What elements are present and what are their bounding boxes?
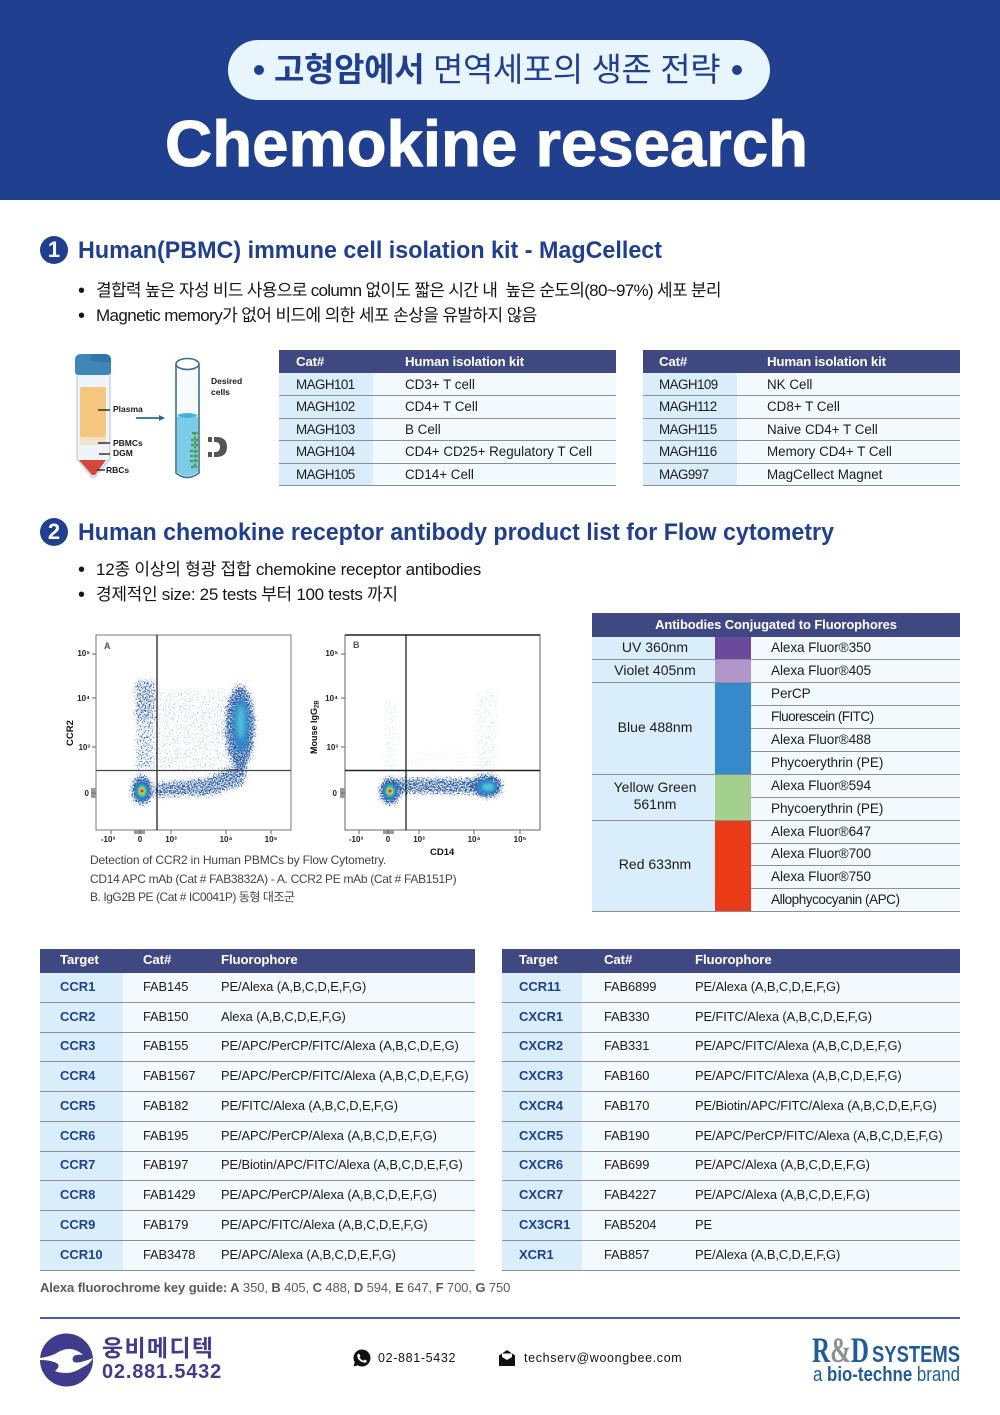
text: •	[78, 280, 85, 302]
plot A y axis title: CCR2	[65, 720, 76, 746]
subtitle pill	[228, 40, 770, 100]
label: desired cells: Desired	[211, 376, 242, 386]
product table header: PE/Alexa (A,B,C,D,E,F,G)	[221, 979, 366, 994]
product table header: PE/APC/Alexa (A,B,C,D,E,F,G)	[221, 1247, 396, 1262]
icon: woongbee logo	[40, 1334, 93, 1386]
table header row: CD4+ CD25+ Regulatory T Cell	[405, 444, 592, 459]
plot B x ticks: 10³	[413, 835, 425, 844]
right pill bullet	[732, 65, 742, 75]
fluorophore table header: Alexa Fluor®350	[771, 640, 871, 655]
main title: Chemokine research	[165, 107, 808, 180]
header banner	[0, 0, 1000, 200]
plot B x ticks: 10⁵	[514, 835, 527, 844]
product table header: PE/Biotin/APC/FITC/Alexa (A,B,C,D,E,F,G)	[695, 1098, 937, 1113]
product table header: PE/Alexa (A,B,C,D,E,F,G)	[695, 1247, 840, 1262]
icon: phone bubble	[353, 1350, 370, 1366]
product table header: PE/APC/FITC/Alexa (A,B,C,D,E,F,G)	[695, 1068, 902, 1083]
product table header	[40, 949, 475, 1270]
product table header: FAB699	[604, 1157, 649, 1172]
product table header: FAB1567	[143, 1068, 195, 1083]
phone number: 02-881-5432	[378, 1351, 456, 1365]
product table header: Target	[60, 952, 99, 967]
fluorophore table header: Fluorescein (FITC)	[771, 709, 874, 724]
alexa key guide: Alexa fluorochrome key guide: A 350, B 405, C 488, D 594, E 647, F 700, G 750	[40, 1280, 510, 1295]
product table header: FAB197	[143, 1157, 188, 1172]
plot B y ticks	[325, 649, 338, 798]
product table header: FAB330	[604, 1009, 649, 1024]
section 2 bullet two: 경제적인 size: 25 tests 부터 100 tests 까지	[96, 585, 398, 604]
section 2 number badge	[40, 518, 68, 546]
flow plot caption	[90, 853, 456, 904]
fluorophore table header: Alexa Fluor®488	[771, 732, 871, 747]
plot A label: A	[104, 641, 111, 651]
fluorophore table header: Phycoerythrin (PE)	[771, 755, 883, 770]
product table header: CXCR2	[519, 1038, 563, 1053]
product table header: FAB331	[604, 1038, 649, 1053]
product table header: PE/APC/FITC/Alexa (A,B,C,D,E,F,G)	[695, 1038, 902, 1053]
product table header: Target	[519, 952, 558, 967]
plot B x ticks: 0	[386, 835, 391, 844]
product table header: FAB155	[143, 1038, 188, 1053]
table header row: NK Cell	[767, 377, 812, 392]
fluorophore table header: Violet 405nm	[614, 662, 696, 678]
subtitle bold: 고형암에서	[274, 51, 424, 88]
product table header: FAB3478	[143, 1247, 195, 1262]
flow plot caption: CD14 APC mAb (Cat # FAB3832A) - A. CCR2 PE mAb (Cat # FAB151P)	[90, 872, 456, 886]
plot A scatter density	[131, 680, 255, 805]
left pill bullet	[254, 65, 264, 75]
logo: R&D Systems: SYSTEMS	[872, 1341, 960, 1367]
table: products left	[40, 949, 475, 1271]
text: •	[78, 559, 85, 581]
fluorophore table header: Phycoerythrin (PE)	[771, 801, 883, 816]
plot B x ticks	[349, 835, 527, 844]
plot B y ticks: 10³	[326, 743, 338, 752]
table header row: MAGH101	[296, 377, 355, 392]
product table header: XCR1	[519, 1247, 554, 1262]
table header row: MAGH102	[296, 399, 355, 414]
table header row: CD3+ T cell	[405, 377, 475, 392]
table header row: Naive CD4+ T Cell	[767, 422, 878, 437]
product table header: PE	[695, 1217, 712, 1232]
table header row: Memory CD4+ T Cell	[767, 444, 892, 459]
plot B y axis title: 2B	[314, 700, 320, 708]
text: •	[78, 584, 85, 606]
product table header: FAB150	[143, 1009, 188, 1024]
arrow	[136, 415, 165, 421]
product table header: CCR9	[60, 1217, 95, 1232]
product table header: Cat#	[143, 952, 171, 967]
plot B scatter density	[379, 690, 503, 805]
company name: 웅비메디텍	[102, 1335, 214, 1361]
fluorophore table header: Antibodies Conjugated to Fluorophores	[655, 616, 897, 632]
plot B y ticks: 0	[333, 789, 338, 798]
product table header: FAB857	[604, 1247, 649, 1262]
plot B y ticks: 10⁵	[325, 649, 338, 658]
product table header: CCR7	[60, 1157, 95, 1172]
tube layer labels: PBMCs	[113, 438, 143, 448]
fluorophore table header: Alexa Fluor®594	[771, 778, 871, 793]
product table header: CCR10	[60, 1247, 103, 1262]
label: desired cells: cells	[211, 387, 230, 397]
product table header: CXCR7	[519, 1187, 563, 1202]
tube layer labels	[97, 404, 143, 475]
product table header: PE/APC/PerCP/FITC/Alexa (A,B,C,D,E,F,G)	[221, 1068, 469, 1083]
product table header: FAB6899	[604, 979, 656, 994]
section 2 number badge: 2	[48, 519, 60, 544]
icon: centrifuge tube	[75, 354, 111, 477]
table: fluorophores by laser	[592, 613, 960, 912]
table header row: MagCellect Magnet	[767, 467, 882, 482]
flow plot caption: B. IgG2B PE (Cat # IC0041P) 동형 대조군	[90, 890, 295, 904]
product table header: PE/APC/Alexa (A,B,C,D,E,F,G)	[695, 1187, 870, 1202]
icon: mail	[499, 1350, 515, 1366]
table header row: MAGH103	[296, 422, 355, 437]
tube layer labels: Plasma	[113, 404, 143, 414]
tube layer labels: DGM	[113, 448, 133, 458]
product table header: FAB4227	[604, 1187, 656, 1202]
email address: techserv@woongbee.com	[524, 1351, 682, 1365]
product table header: Cat#	[604, 952, 632, 967]
table: products right	[502, 949, 960, 1271]
product table header: Alexa (A,B,C,D,E,F,G)	[221, 1009, 346, 1024]
fluorophore table header: PerCP	[771, 686, 811, 701]
plot B	[309, 635, 540, 858]
plot A y ticks: 10⁵	[77, 649, 90, 658]
plot B y axis title: Mouse IgG	[309, 708, 319, 754]
product table header: CCR1	[60, 979, 95, 994]
section 1 heading: Human(PBMC) immune cell isolation kit - MagCellect	[78, 237, 662, 264]
plot B x ticks: -10³	[349, 835, 363, 844]
product table header: CXCR1	[519, 1009, 563, 1024]
fluorophore table header: Alexa Fluor®700	[771, 846, 871, 861]
product table header: FAB1429	[143, 1187, 195, 1202]
plot A y ticks: 0	[85, 789, 90, 798]
label: desired cells	[211, 376, 242, 397]
product table header: FAB5204	[604, 1217, 656, 1232]
product table header: CXCR6	[519, 1157, 563, 1172]
product table header: CCR8	[60, 1187, 95, 1202]
fluorophore table header: Allophycocyanin (APC)	[771, 892, 900, 907]
plot B x ticks: 10⁴	[468, 835, 480, 844]
plot A x ticks: 0	[138, 835, 143, 844]
diagram: magnetic cell separation	[75, 354, 242, 478]
product table header: FAB160	[604, 1068, 649, 1083]
product table header: FAB145	[143, 979, 188, 994]
table header row: MAGH112	[659, 399, 717, 414]
table header row: MAGH109	[659, 377, 718, 392]
flow cytometry plots	[65, 634, 540, 858]
table: isolation kits left	[279, 350, 616, 486]
plot A y ticks	[77, 649, 90, 798]
table header row: MAG997	[659, 467, 709, 482]
fluorophore table header: 561nm	[634, 796, 676, 812]
product table header: CXCR3	[519, 1068, 563, 1083]
tube layer labels: RBCs	[106, 465, 129, 475]
footer	[40, 1317, 960, 1386]
subtitle regular: 면역세포의 생존 전략	[433, 51, 720, 88]
product table header: PE/APC/PerCP/Alexa (A,B,C,D,E,F,G)	[221, 1128, 437, 1143]
plot A	[65, 635, 291, 844]
product table header	[502, 949, 960, 1270]
fluorophore table header: Alexa Fluor®647	[771, 824, 871, 839]
logo: R&D Systems	[812, 1330, 960, 1386]
fluorophore table header: UV 360nm	[622, 639, 688, 655]
product table header: FAB190	[604, 1128, 649, 1143]
table header row: Human isolation kit	[405, 354, 524, 369]
plot A y ticks: 10³	[78, 743, 90, 752]
table header row: MAGH115	[659, 422, 717, 437]
plot A x ticks: -10³	[101, 835, 115, 844]
product table header: CCR11	[519, 979, 561, 994]
table header row: Cat#	[296, 354, 324, 369]
fluorophore table header: Red 633nm	[619, 856, 691, 872]
plot B x axis title: CD14	[430, 847, 455, 858]
product table header: CCR2	[60, 1009, 95, 1024]
section 1 bullet one: 결합력 높은 자성 비드 사용으로 column 없이도 짧은 시간 내 높은 순도의(80~97%) 세포 분리	[96, 281, 721, 300]
table header row	[279, 350, 616, 485]
product table header: CCR3	[60, 1038, 95, 1053]
company phone: 02.881.5432	[102, 1361, 222, 1383]
product table header: PE/Biotin/APC/FITC/Alexa (A,B,C,D,E,F,G)	[221, 1157, 463, 1172]
section 2 heading: Human chemokine receptor antibody product list for Flow cytometry	[78, 519, 835, 546]
table header row: MAGH104	[296, 444, 355, 459]
product table header: FAB182	[143, 1098, 188, 1113]
fluorophore table header: Alexa Fluor®750	[771, 869, 871, 884]
product table header: CCR5	[60, 1098, 95, 1113]
product table header: CX3CR1	[519, 1217, 570, 1232]
fluorophore table header: Yellow Green	[614, 779, 696, 795]
product table header: PE/Alexa (A,B,C,D,E,F,G)	[695, 979, 840, 994]
product table header: FAB170	[604, 1098, 649, 1113]
logo: R&D Systems: R&D	[812, 1330, 869, 1370]
text: •	[78, 305, 85, 327]
product table header: CCR4	[60, 1068, 95, 1083]
plot B label: B	[353, 640, 360, 650]
plot B y ticks: 10⁴	[325, 694, 338, 703]
product table header: PE/APC/FITC/Alexa (A,B,C,D,E,F,G)	[221, 1217, 428, 1232]
logo: R&D Systems: a bio-techne brand	[813, 1364, 960, 1386]
product table header: CCR6	[60, 1128, 95, 1143]
table header row: MAGH105	[296, 467, 355, 482]
icon: test tube with cells	[176, 358, 199, 478]
product table header: FAB195	[143, 1128, 188, 1143]
product table header: PE/APC/PerCP/FITC/Alexa (A,B,C,D,E,G)	[221, 1038, 459, 1053]
fluorophore table header: Alexa Fluor®405	[771, 663, 871, 678]
product table header: Fluorophore	[695, 952, 772, 967]
table header row: MAGH116	[659, 444, 717, 459]
fluorophore table header	[592, 613, 960, 911]
product table header: CXCR5	[519, 1128, 563, 1143]
product table header: PE/APC/PerCP/FITC/Alexa (A,B,C,D,E,F,G)	[695, 1128, 943, 1143]
table header row: Cat#	[659, 354, 687, 369]
table header row: Human isolation kit	[767, 354, 886, 369]
table: isolation kits right	[643, 350, 960, 486]
product table header: PE/FITC/Alexa (A,B,C,D,E,F,G)	[221, 1098, 398, 1113]
product table header: Fluorophore	[221, 952, 298, 967]
section 1 number badge	[40, 236, 68, 264]
product table header: FAB179	[143, 1217, 188, 1232]
product table header: PE/APC/Alexa (A,B,C,D,E,F,G)	[695, 1157, 870, 1172]
table header row: CD4+ T Cell	[405, 399, 478, 414]
product table header: PE/APC/PerCP/Alexa (A,B,C,D,E,F,G)	[221, 1187, 437, 1202]
section 1 bullet two: Magnetic memory가 없어 비드에 의한 세포 손상을 유발하지 않음	[96, 306, 537, 325]
plot A x ticks: 10⁵	[265, 835, 278, 844]
flow plot caption: Detection of CCR2 in Human PBMCs by Flow Cytometry.	[90, 853, 386, 867]
plot A x ticks: 10⁴	[220, 835, 232, 844]
fluorophore table header: Blue 488nm	[618, 719, 692, 735]
product table header: PE/FITC/Alexa (A,B,C,D,E,F,G)	[695, 1009, 872, 1024]
product table header: CXCR4	[519, 1098, 563, 1113]
plot A x ticks	[101, 835, 278, 844]
section 1 number badge: 1	[48, 237, 60, 262]
table header row: B Cell	[405, 422, 441, 437]
section 2 bullet one: 12종 이상의 형광 접합 chemokine receptor antibodies	[96, 560, 481, 579]
plot A y ticks: 10⁴	[77, 694, 90, 703]
plot A x ticks: 10³	[165, 835, 177, 844]
table header row: CD14+ Cell	[405, 467, 474, 482]
icon: magnet	[208, 437, 227, 457]
table header row: CD8+ T Cell	[767, 399, 840, 414]
table header row	[643, 350, 960, 485]
